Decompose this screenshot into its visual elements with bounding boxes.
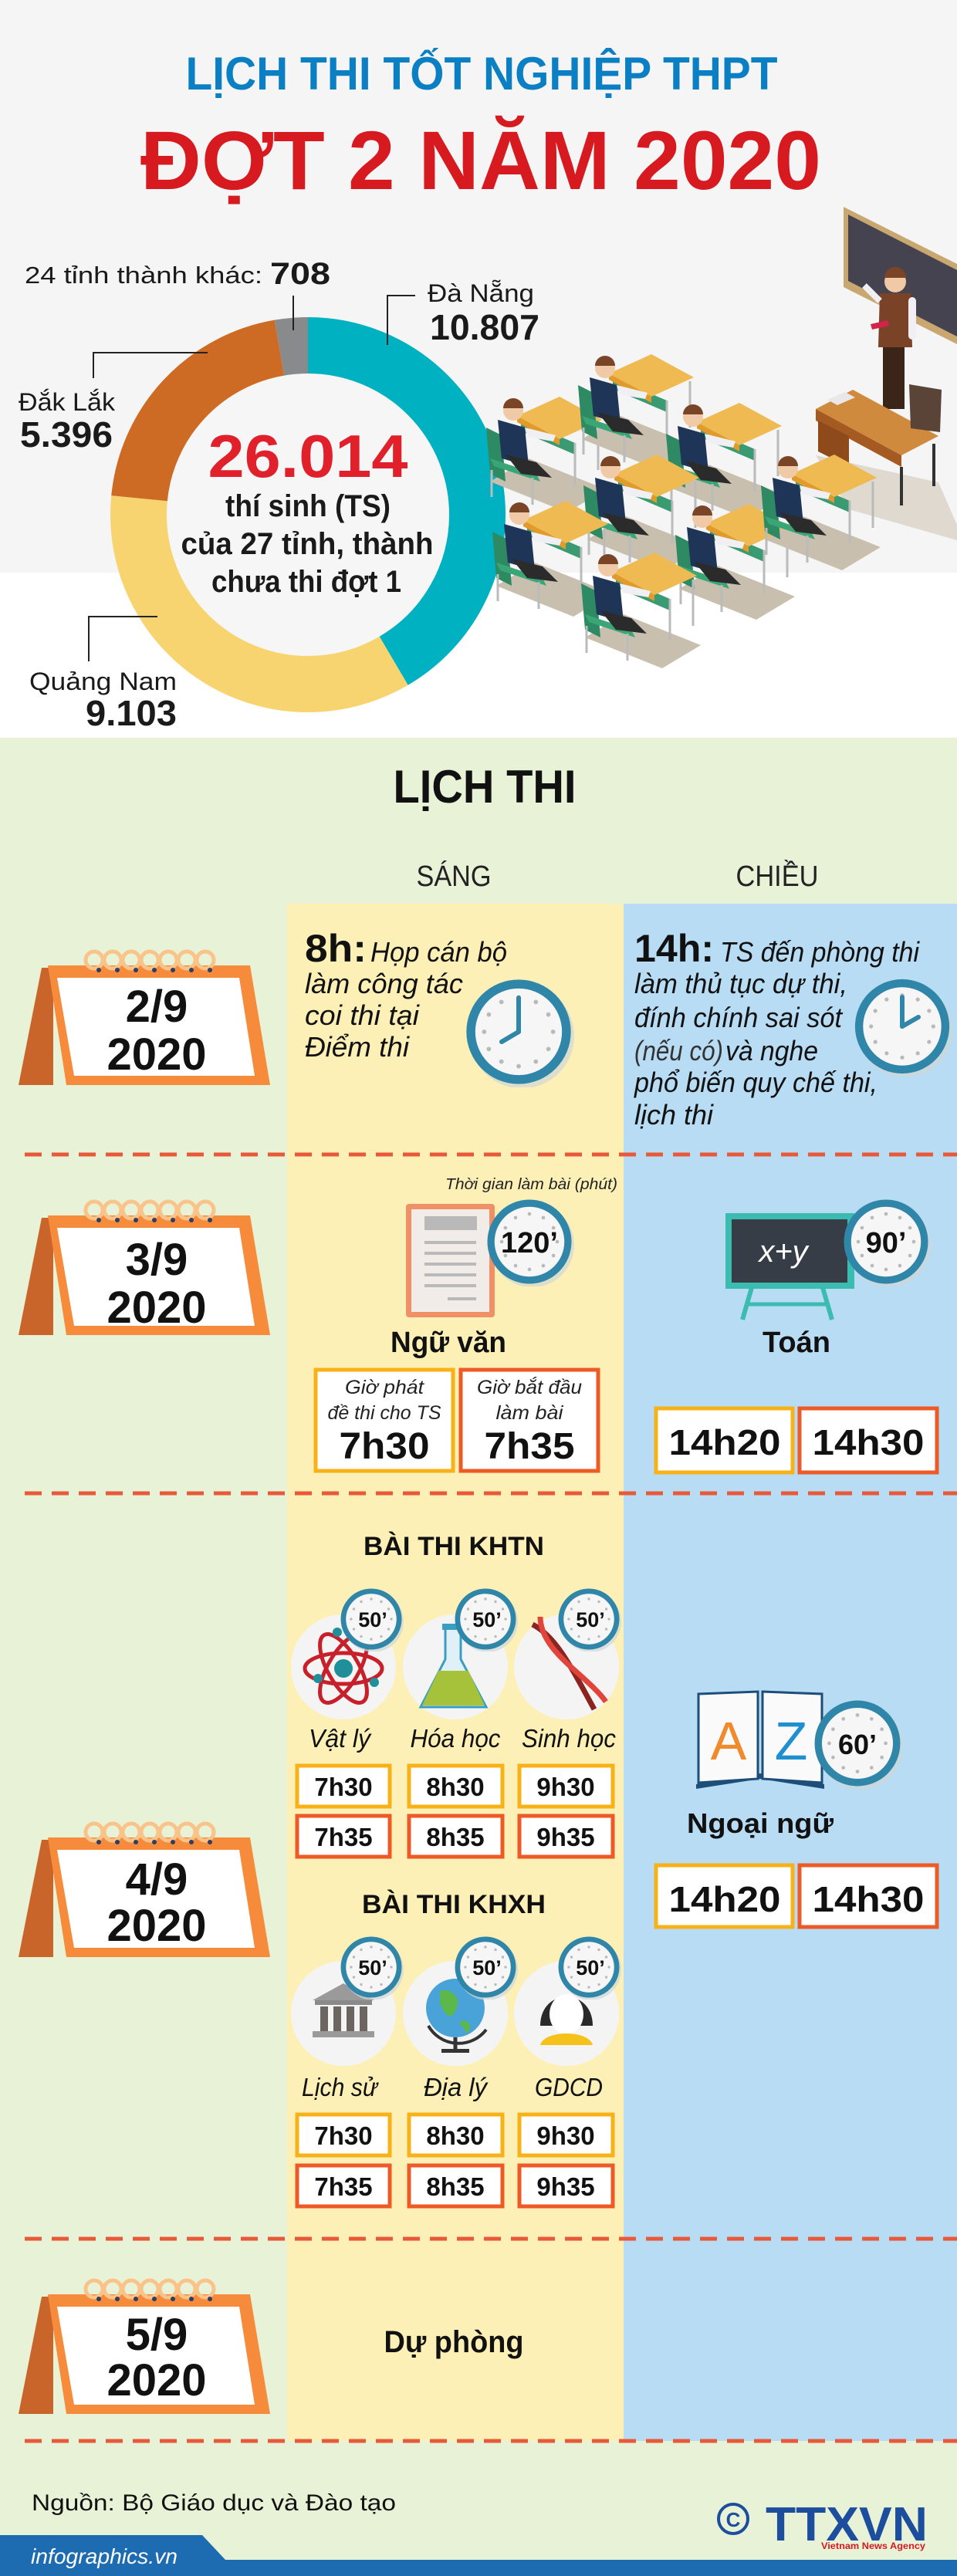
box: gio phat de: 7h30 [340, 1426, 429, 1467]
clock 90: 90’ [866, 1227, 906, 1259]
row 4/9 [19, 1532, 937, 2206]
clock 120 [487, 1199, 574, 1287]
time boxes KHXH: 9h30 [536, 2121, 595, 2150]
calendar 3/9: 2020 [107, 1283, 207, 1333]
label: Da Nang [387, 279, 539, 347]
time boxes KHXH: 9h35 [536, 2172, 595, 2201]
time boxes KHTN: 9h35 [536, 1823, 595, 1851]
afternoon text: 14h: [634, 927, 714, 970]
label: 24 tinh thanh khac: 708 [270, 257, 330, 291]
clock 90 [844, 1199, 931, 1287]
subject labels KHTN: Hóa học [411, 1724, 501, 1753]
icon: book A-Z: A [711, 1711, 747, 1771]
subject labels KHTN: Vật lý [309, 1724, 372, 1753]
box: gio bat dau: 7h35 [485, 1426, 574, 1467]
calendar 4/9: 4/9 [126, 1854, 188, 1905]
afternoon text: làm thủ tục dự thi, [634, 968, 847, 999]
footer bar [0, 2535, 957, 2576]
logo: TTXVN: TTXVN [766, 2498, 928, 2551]
icon: history [291, 1961, 396, 2066]
blackboard [844, 207, 957, 344]
column headers: CHIỀU [736, 859, 818, 893]
time boxes KHXH: 7h35 [314, 2172, 373, 2201]
morning text: 8h: [305, 927, 367, 970]
clock 8h [466, 979, 574, 1088]
afternoon text: TS đến phòng thi [720, 936, 920, 968]
icon: physics [291, 1614, 396, 1719]
logo: TTXVN: Vietnam News Agency [821, 2541, 925, 2551]
afternoon text: và nghe [725, 1035, 818, 1067]
center text: 26.014 [208, 422, 407, 490]
teacher desk [816, 384, 942, 505]
subject labels KHTN [309, 1724, 616, 1753]
row 2/9 [19, 927, 952, 1131]
dividers [25, 1154, 957, 2441]
teacher [864, 267, 916, 409]
row 5/9 [19, 2280, 523, 2414]
box: gio bat dau: Giờ bắt đầu [477, 1376, 582, 1398]
schedule background [0, 738, 957, 2576]
label: Da Nang: Đà Nẵng [428, 279, 534, 307]
clocks 50 KHTN [341, 1589, 621, 1652]
classroom illustration [486, 207, 957, 668]
time boxes KHXH: 8h35 [426, 2172, 485, 2201]
heading: KHTN: BÀI THI KHTN [364, 1532, 544, 1561]
title: ĐỢT 2 NĂM 2020 [140, 113, 821, 207]
morning text: làm công tác [305, 968, 463, 999]
subject labels KHXH: Lịch sử [302, 2073, 379, 2101]
center text: thí sinh (TS) [225, 489, 391, 523]
subject: Ngu van: Ngữ văn [391, 1327, 506, 1359]
time boxes KHTN: 7h30 [314, 1773, 373, 1801]
icon: document [406, 1204, 495, 1317]
students [486, 397, 606, 512]
icon: book A-Z [696, 1692, 824, 1789]
clocks 50 KHXH: 50’ [358, 1956, 387, 1979]
center text: của 27 tỉnh, thành [181, 527, 434, 561]
clocks 50 KHTN: 50’ [472, 1608, 502, 1631]
morning text: coi thi tại [305, 999, 420, 1031]
calendar 2/9 [19, 952, 270, 1085]
subject labels KHXH: Địa lý [424, 2073, 489, 2101]
time boxes KHXH: 7h30 [314, 2121, 373, 2150]
time boxes KHTN: 8h30 [426, 1773, 485, 1801]
calendar 5/9: 2020 [107, 2355, 207, 2405]
subject labels KHTN: Sinh học [522, 1724, 616, 1753]
calendar 5/9: 5/9 [126, 2310, 188, 2360]
afternoon text: (nếu có) [634, 1035, 723, 1067]
time boxes KHXH: 8h30 [426, 2121, 485, 2150]
box: 14h20 [656, 1408, 793, 1472]
calendar 4/9: 2020 [107, 1901, 207, 1951]
icon: book A-Z: Z [775, 1711, 807, 1771]
clock 14h [855, 979, 952, 1077]
time boxes KHXH [297, 2115, 613, 2206]
clocks 50 KHXH: 50’ [576, 1956, 605, 1979]
clocks 50 KHXH [341, 1937, 621, 2000]
label: Quang Nam [29, 617, 177, 733]
label: 24 tinh thanh khac [25, 257, 330, 330]
calendar 3/9: 3/9 [126, 1235, 188, 1285]
label: Dak Lak: Đắk Lắk [19, 388, 116, 416]
label: Dak Lak: 5.396 [20, 414, 113, 455]
clock 60 [815, 1701, 903, 1790]
clocks 50 KHXH: 50’ [472, 1956, 502, 1979]
clock 60: 60’ [838, 1729, 877, 1760]
label: Da Nang: 10.807 [430, 307, 539, 347]
subject: Ngoai ngu: Ngoại ngữ [687, 1807, 834, 1839]
box: gio phat de: đề thi cho TS [327, 1402, 441, 1424]
icon: geography [403, 1961, 508, 2066]
label: Dak Lak [19, 353, 208, 455]
calendar 2/9: 2020 [107, 1029, 207, 1080]
clocks 50 KHTN: 50’ [576, 1608, 605, 1631]
label: Quang Nam: 9.103 [86, 693, 177, 733]
donut chart [139, 346, 477, 684]
clocks 50 KHTN: 50’ [358, 1608, 387, 1631]
box: 14h30: 14h30 [812, 1422, 925, 1462]
icon: blackboard: x+y [757, 1235, 810, 1269]
box: 14h20: 14h20 [668, 1422, 781, 1462]
clock 120: 120’ [501, 1227, 558, 1259]
box: 14h30 [800, 1865, 937, 1927]
box: 14h20 [656, 1865, 793, 1927]
title [140, 48, 821, 207]
icon: civics [514, 1961, 619, 2066]
column headers: SÁNG [417, 860, 491, 893]
text: du phong: Dự phòng [384, 2325, 523, 2359]
subject: Toan: Toán [763, 1327, 830, 1359]
label: Quang Nam: Quảng Nam [29, 668, 177, 695]
subject labels KHXH: GDCD [535, 2073, 603, 2101]
icon: chemistry [403, 1614, 508, 1719]
label: 24 tinh thanh khac: 24 tỉnh thành khác: [25, 262, 262, 289]
calendar 4/9 [19, 1824, 270, 1957]
morning text: Họp cán bộ [370, 936, 507, 968]
heading: LICH THI: LỊCH THI [394, 761, 576, 813]
icon: biology [514, 1614, 619, 1719]
top background [0, 0, 957, 573]
title: LỊCH THI TỐT NGHIỆP THPT [185, 48, 778, 100]
morning text [305, 927, 507, 1063]
row 3/9 [19, 1176, 937, 1472]
afternoon text: phổ biến quy chế thi, [634, 1067, 878, 1098]
calendar 2/9: 2/9 [126, 982, 188, 1032]
heading: KHXH: BÀI THI KHXH [362, 1890, 546, 1919]
time boxes KHTN: 9h30 [536, 1773, 595, 1801]
box: gio phat de [316, 1370, 453, 1471]
note: duration: Thời gian làm bài (phút) [445, 1176, 617, 1193]
box: gio bat dau: làm bài [495, 1402, 564, 1424]
center text [181, 422, 434, 599]
footer bar: infographics.vn [31, 2544, 178, 2568]
center text: chưa thi đợt 1 [211, 565, 401, 599]
column headers [417, 859, 818, 893]
calendar 5/9 [19, 2280, 270, 2414]
box: 14h20: 14h20 [668, 1879, 781, 1919]
source: Nguồn: Bộ Giáo dục và Đào tạo [32, 2490, 396, 2516]
logo: TTXVN: C [726, 2508, 741, 2531]
box: gio phat de: Giờ phát [345, 1377, 424, 1398]
icon: blackboard [725, 1213, 854, 1320]
afternoon text: lịch thi [634, 1099, 714, 1131]
afternoon text: đính chính sai sót [634, 1002, 844, 1033]
calendar 3/9 [19, 1202, 270, 1335]
afternoon text [634, 927, 920, 1131]
time boxes KHTN: 7h35 [314, 1823, 373, 1851]
morning text: Điểm thi [305, 1031, 410, 1063]
box: 14h30 [800, 1408, 937, 1472]
box: gio bat dau [461, 1370, 598, 1471]
time boxes KHTN: 8h35 [426, 1823, 485, 1851]
time boxes KHTN [297, 1766, 613, 1857]
subject labels KHXH [302, 2073, 603, 2101]
box: 14h30: 14h30 [812, 1879, 925, 1919]
